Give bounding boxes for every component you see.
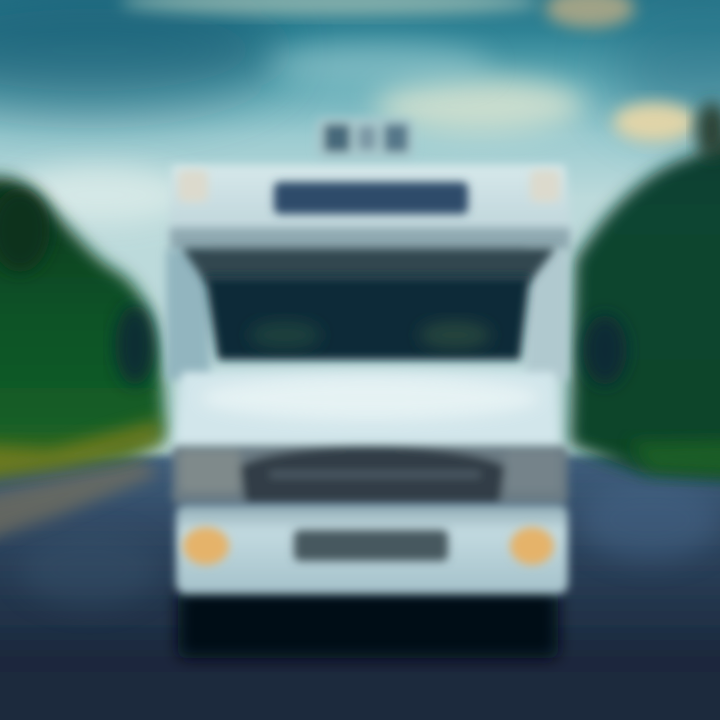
hood [176,372,558,446]
trees: right [570,102,720,480]
trees: left [0,175,165,482]
cab visor band [170,228,570,252]
road [0,455,720,720]
roof air conditioner [316,118,414,158]
left fog lamp [183,527,229,565]
front bumper [176,504,568,594]
clouds [120,0,697,142]
shadow under vehicle [178,590,558,658]
grille and headlights [172,446,568,504]
right fog lamp [510,527,554,565]
cab shade [182,248,556,282]
top window [274,182,468,214]
sky [0,0,720,500]
lower air intake [294,530,448,561]
cab side pillars [166,250,568,380]
motorhome [166,118,572,658]
roof marker lights [178,170,560,202]
roof cap [170,165,572,240]
windshield [205,276,530,360]
